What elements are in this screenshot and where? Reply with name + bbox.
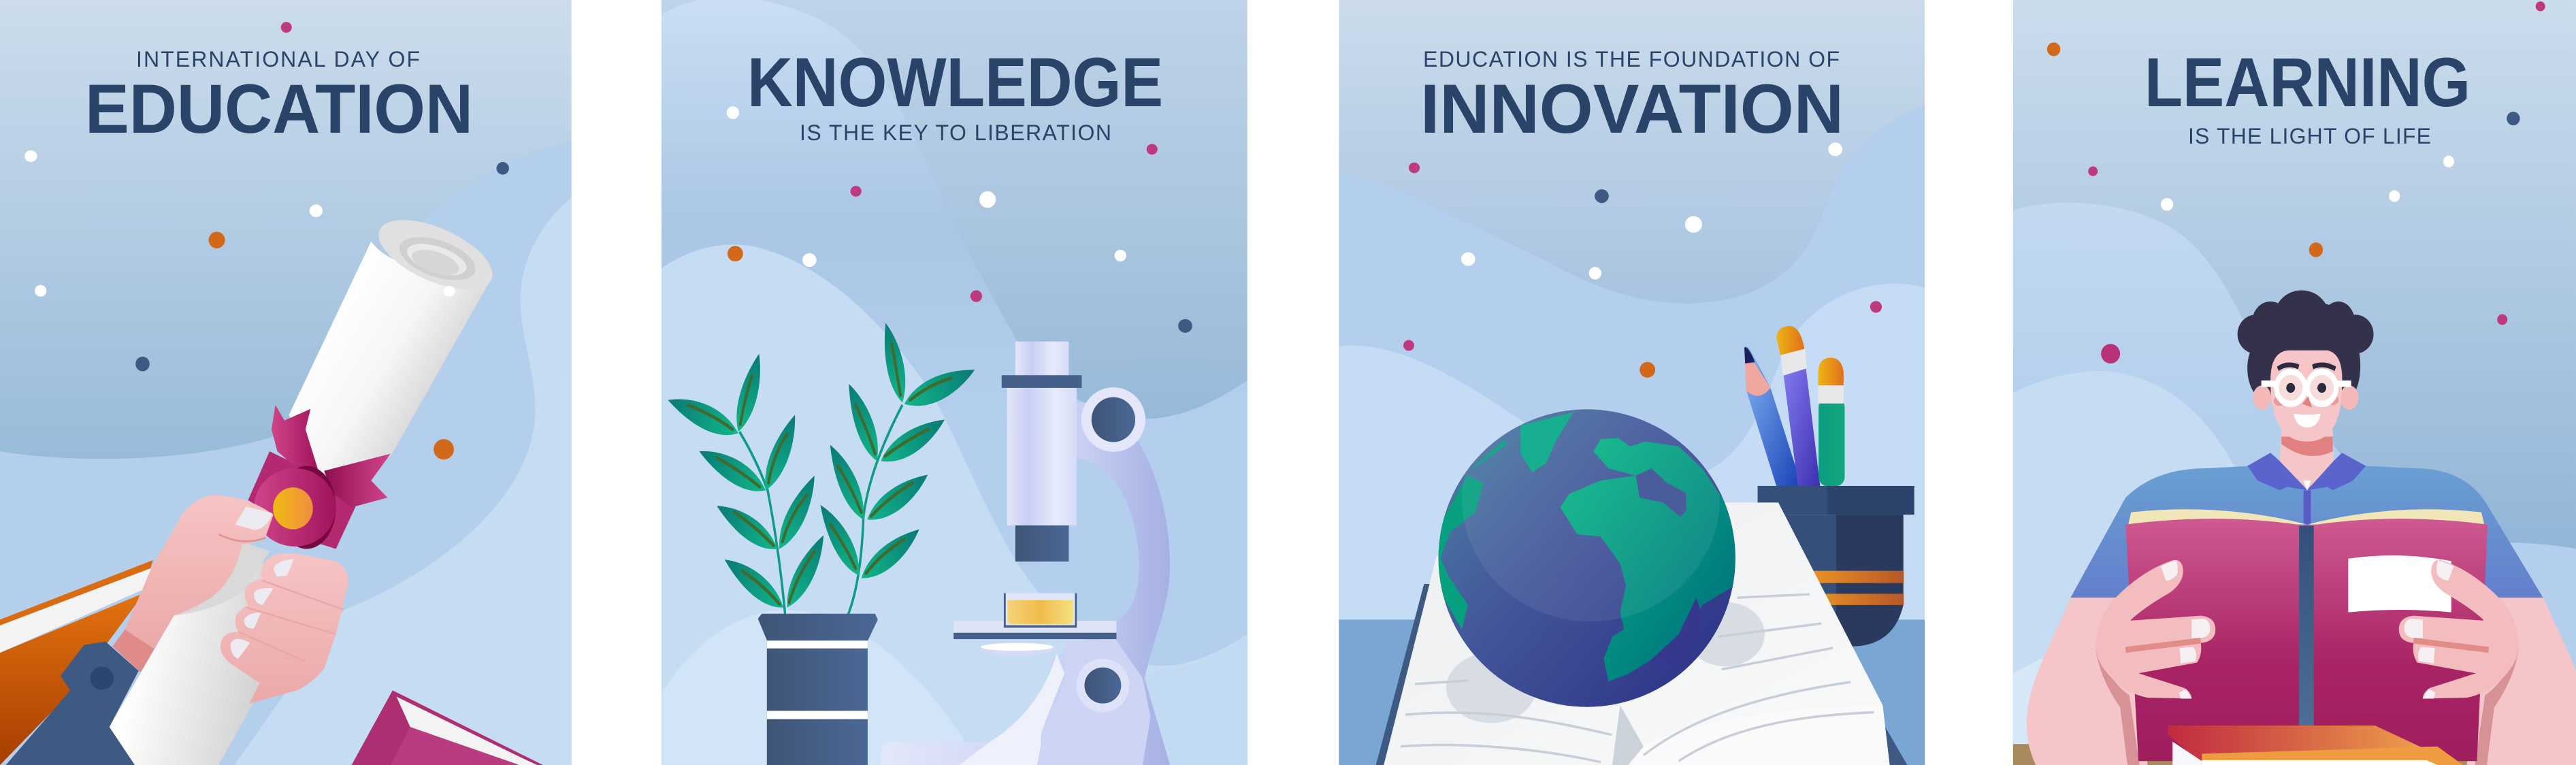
plant pot	[758, 614, 878, 765]
continents	[1561, 438, 1735, 681]
plant stems	[740, 405, 902, 616]
left arm	[2027, 598, 2148, 765]
heading: Innovation: INNOVATION	[1420, 70, 1844, 148]
table	[1339, 619, 1925, 765]
heading: Knowledge: KNOWLEDGE	[747, 44, 1163, 121]
left hand	[2096, 560, 2215, 699]
right hand	[2399, 560, 2519, 699]
plant leaves	[665, 320, 979, 616]
panel: International Day of Education poster	[0, 0, 572, 765]
small closed book	[2168, 726, 2463, 765]
heading: Learning: LEARNING	[2145, 44, 2471, 121]
panel 2 background and illustration	[662, 0, 1248, 765]
subheading: is the key to liberation: IS THE KEY TO LIBERATION	[800, 120, 1111, 145]
decorative dots	[727, 106, 1192, 333]
icon: microscope	[881, 342, 1170, 765]
icon: ribbon and seal	[248, 405, 391, 549]
icon: open book	[1376, 502, 1907, 765]
heading: Education: EDUCATION	[85, 70, 473, 148]
subheading: is the light of life: IS THE LIGHT OF LIFE	[2188, 124, 2431, 148]
panel: Learning poster	[2013, 0, 2576, 765]
head and neck	[2238, 291, 2374, 489]
collar	[2247, 453, 2366, 525]
heading: International Day of: INTERNATIONAL DAY OF	[136, 47, 420, 71]
icon: orange book	[0, 560, 153, 765]
open magenta book	[2125, 509, 2488, 761]
panel 4 background and illustration	[2013, 0, 2576, 765]
panel 1 background and illustration	[0, 0, 572, 765]
decorative dots	[2047, 1, 2545, 363]
shirt	[2070, 466, 2543, 598]
icon: pencil cup with pencils	[1744, 326, 1914, 647]
decorative dots	[1403, 142, 1882, 378]
icon: globe	[1439, 409, 1735, 707]
subheading: education is the foundation of: EDUCATION IS THE FOUNDATION OF	[1423, 47, 1840, 71]
panel: Innovation poster	[1339, 0, 1925, 765]
panel: Knowledge poster	[662, 0, 1248, 765]
icon: diploma scroll	[109, 206, 499, 765]
table	[2013, 744, 2467, 765]
icon: magenta book	[352, 690, 543, 765]
decorative dots	[25, 22, 509, 459]
icon: hand holding diploma	[6, 495, 348, 765]
icon: potted plant	[665, 320, 979, 765]
panel 3 background and illustration	[1339, 0, 1925, 765]
illustration: student reading	[2027, 291, 2576, 765]
right arm	[2466, 598, 2576, 765]
